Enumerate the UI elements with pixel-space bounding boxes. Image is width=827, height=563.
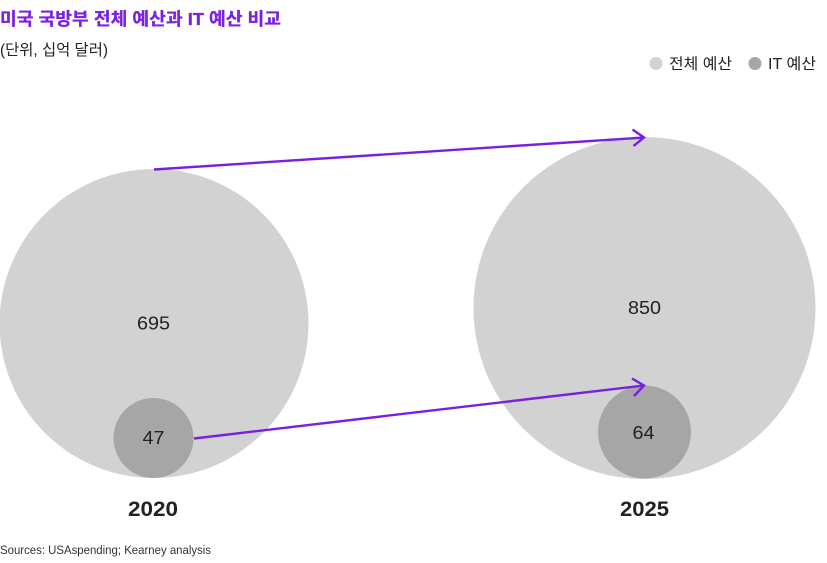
legend item: total budget: 전체 예산: [669, 55, 732, 73]
bubble chart 2025: [474, 137, 816, 521]
arrow: total budget growth: [154, 130, 644, 170]
circle: 2020 total budget: [0, 169, 308, 478]
value: 64: 64: [632, 423, 654, 443]
value: 850: 850: [628, 298, 661, 318]
year label 2020: 2020: [128, 498, 178, 521]
arrow: IT budget growth: [194, 378, 644, 438]
source note: Sources: USAspending; Kearney analysis: [0, 543, 211, 557]
legend item: IT budget: [748, 55, 816, 73]
subtitle: unit: (단위, 십억 달러): [0, 41, 108, 59]
circle: 2025 total budget: [474, 137, 816, 479]
value: 695: 695: [137, 314, 170, 334]
legend item: IT budget: IT 예산: [768, 55, 816, 73]
value: 47: 47: [142, 428, 164, 448]
circle: 2025 IT budget: [598, 386, 691, 478]
title: 미국 국방부 전체 예산과 IT 예산 비교: [0, 9, 281, 29]
legend: [650, 55, 816, 73]
circle: 2020 IT budget: [114, 398, 194, 478]
year label 2025: 2025: [620, 498, 669, 521]
bubble chart 2020: [0, 169, 308, 521]
